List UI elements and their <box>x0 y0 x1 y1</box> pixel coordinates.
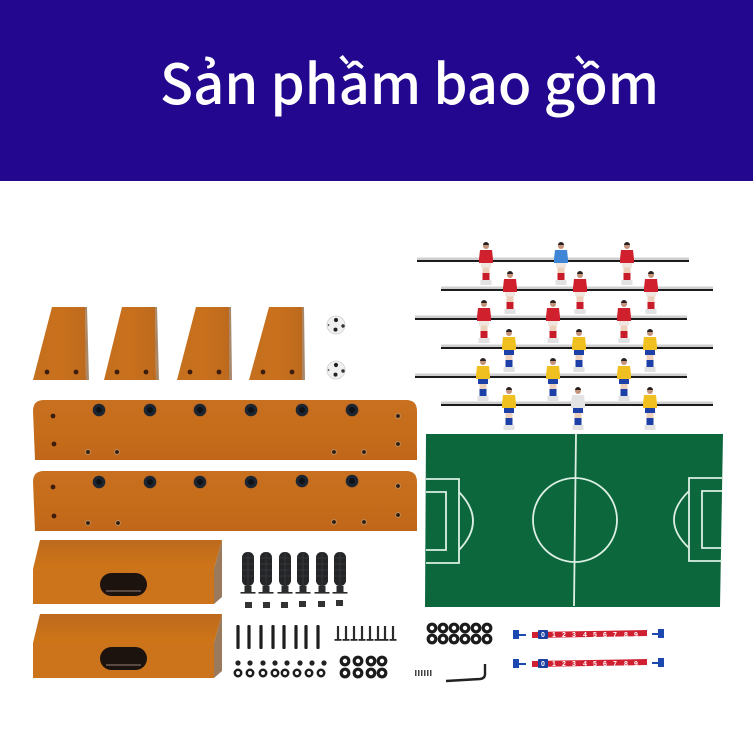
score counter 1: 9 <box>634 632 638 639</box>
score counter 2: 7 <box>613 661 617 668</box>
score counter 2: 6 <box>603 661 607 668</box>
end box 2 <box>33 614 222 678</box>
score counter 2 <box>513 658 664 668</box>
tiny screws <box>415 670 432 676</box>
long bolts <box>236 625 320 649</box>
score counter 2: 3 <box>572 661 576 668</box>
score counter 1: 1 <box>552 632 556 639</box>
score counter 2: 8 <box>624 661 628 668</box>
score counter 1: 6 <box>603 632 607 639</box>
washers 4 by 2 <box>341 657 386 677</box>
score counter 2: 4 <box>583 661 587 668</box>
header band <box>0 0 753 181</box>
end box 1 <box>33 540 222 604</box>
soccer balls <box>327 316 345 379</box>
score counter 1: 5 <box>593 632 597 639</box>
green playing field <box>425 434 723 607</box>
side panel 1 <box>33 400 417 460</box>
score counter 2: 1 <box>552 661 556 668</box>
small nuts and washers <box>235 660 327 676</box>
score counter 1 <box>513 629 664 639</box>
short bolts <box>334 626 396 641</box>
score counter 2: 2 <box>562 661 566 668</box>
score counter 1: 3 <box>572 632 576 639</box>
score counter 2: 5 <box>593 661 597 668</box>
washers 6 by 2 <box>428 624 491 643</box>
wooden legs <box>33 307 305 380</box>
title: Sản phầm bao gồm <box>160 40 659 120</box>
score counter 2: 0 <box>541 661 545 668</box>
score counter 1: 4 <box>583 632 587 639</box>
score counter 1: 0 <box>541 632 545 639</box>
foosball rods with players <box>415 242 713 430</box>
score counter 1: 8 <box>624 632 628 639</box>
side panel 2 <box>33 471 417 531</box>
hex key <box>446 664 485 681</box>
rubber handles <box>240 552 348 608</box>
score counter 2: 9 <box>634 661 638 668</box>
score counter 1: 7 <box>613 632 617 639</box>
score counter 1: 2 <box>562 632 566 639</box>
